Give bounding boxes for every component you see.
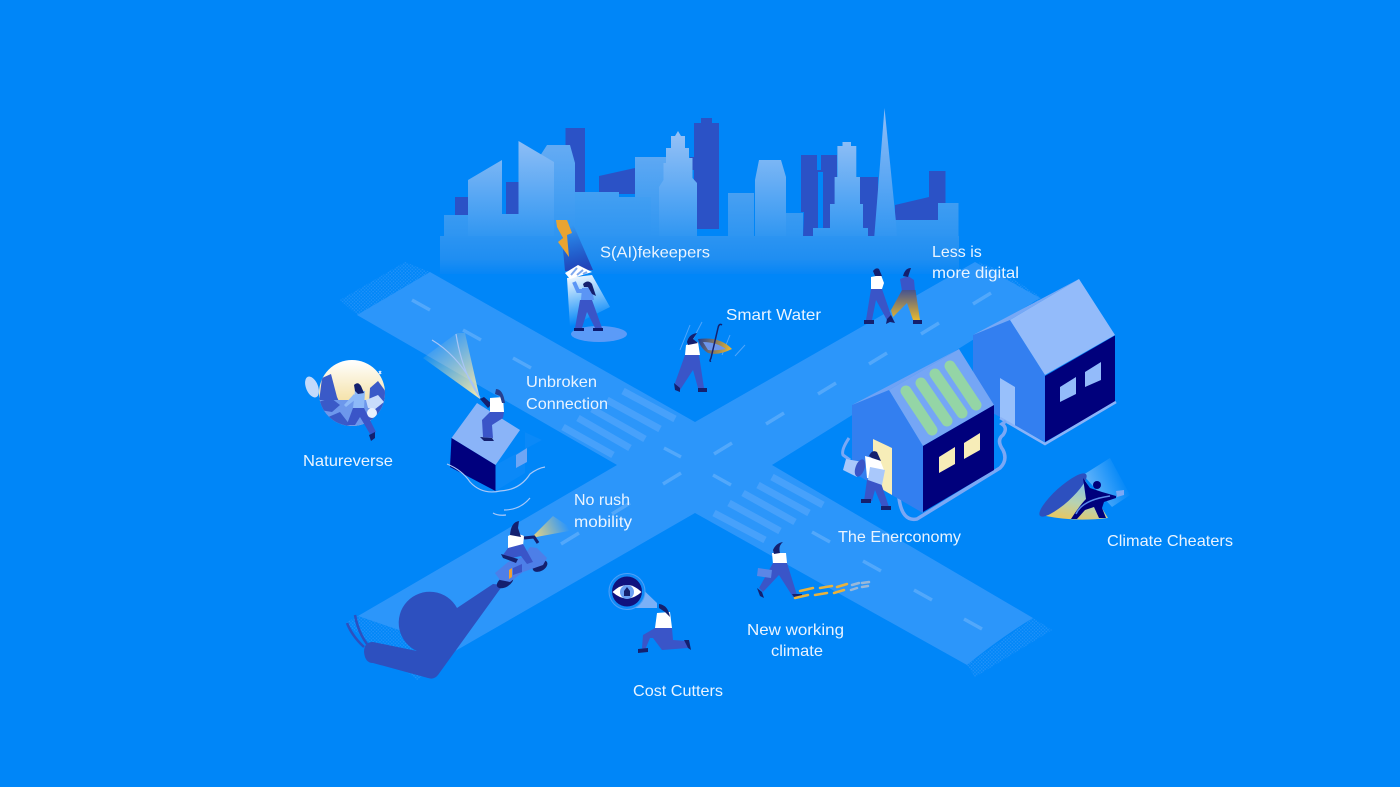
icon: New working climate person [757,542,869,598]
icon: Natureverse [302,360,390,441]
icon: Cost Cutters eye and person [609,574,691,653]
icon: Less is more digital couple [864,268,922,324]
skyline [440,108,959,274]
icon: snail shadow [347,584,503,679]
label: Unbroken Connection: Connection [526,396,608,413]
label: No rush mobility: No rush [574,492,630,509]
label: Unbroken Connection: Unbroken [526,374,597,391]
icon: Enerconomy person with plug [843,438,891,510]
label: Smart Water: Smart Water [726,307,822,324]
label: Less is more digital: Less is [932,244,982,261]
label: Cost Cutters: Cost Cutters [633,683,723,700]
icon: Climate Cheaters [1035,458,1130,522]
icon: Smart Water person with umbrella [674,322,745,392]
label: New working climate: climate [771,643,823,660]
icon: Unbroken Connection house [423,333,545,515]
label: New working climate [747,622,844,660]
label: Less is more digital: more digital [932,265,1019,282]
icon: back house [973,279,1116,444]
label: The Enerconomy: The Enerconomy [838,529,961,546]
icon: S(AI)fekeepers person [556,220,627,342]
lane dashes [412,293,991,629]
label: Less is more digital [932,244,1019,282]
label: S(AI)fekeepers: S(AI)fekeepers [600,244,710,262]
label: Climate Cheaters: Climate Cheaters [1107,533,1233,550]
label: New working climate: New working [747,622,844,639]
roads [357,262,1040,665]
label: No rush mobility [574,492,632,531]
label: Natureverse: Natureverse [303,453,393,470]
road grain [340,262,1052,680]
label: No rush mobility: mobility [574,514,632,531]
icon: power cable [885,421,1006,519]
crosswalks [563,391,823,540]
label: Unbroken Connection [526,374,608,413]
icon: scooter rider [495,516,574,591]
icon: solar house [852,349,994,513]
